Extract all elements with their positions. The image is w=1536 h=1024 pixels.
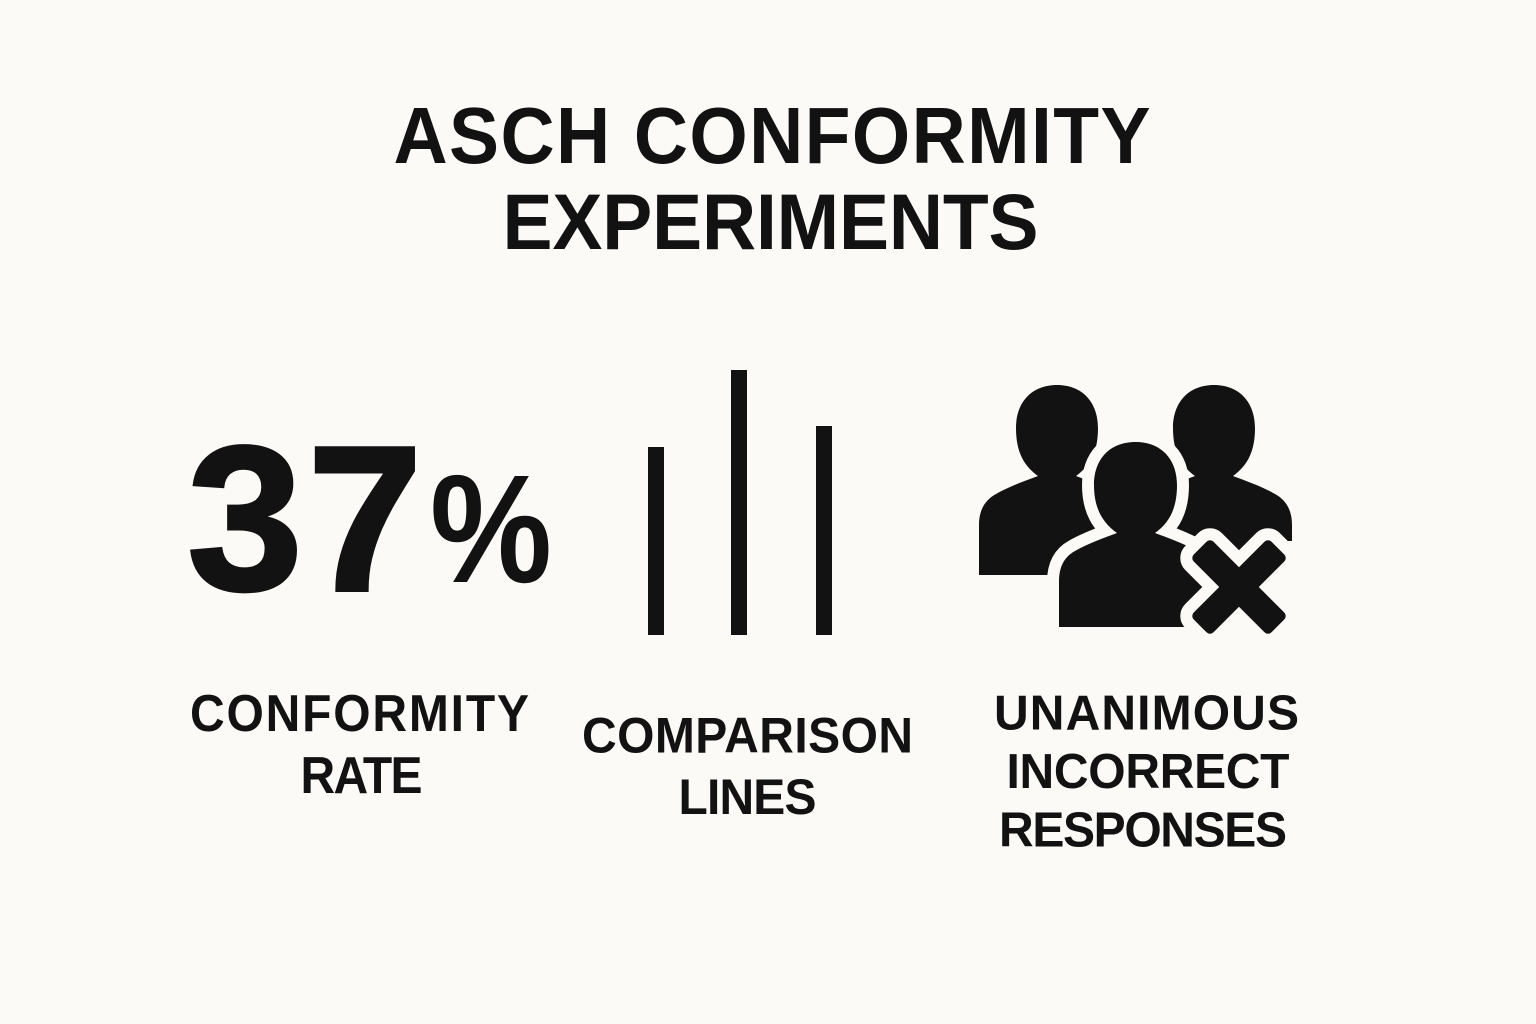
icon: left person	[979, 385, 1135, 575]
icon: front person	[1059, 442, 1214, 627]
label: conformity rate: RATE	[300, 746, 422, 804]
statistic: 37%: 7	[308, 404, 422, 634]
label: unanimous incorrect responses: RESPONSES	[999, 803, 1287, 858]
icon: right person	[1136, 385, 1292, 575]
label: comparison lines: COMPARISON	[582, 709, 913, 764]
statistic: 37%: 3	[187, 404, 303, 634]
label: comparison lines	[582, 709, 913, 825]
statistic: 37%: %	[430, 443, 552, 615]
label: comparison lines: LINES	[678, 770, 816, 825]
label: unanimous incorrect responses	[994, 686, 1299, 858]
title	[394, 92, 1150, 266]
statistic: 37%	[187, 404, 552, 634]
chart: comparison lines	[648, 370, 832, 635]
title: ASCH CONFORMITY	[394, 92, 1150, 181]
label: conformity rate: CONFORMITY	[190, 684, 529, 742]
icon: group with incorrect mark	[979, 385, 1292, 636]
label: conformity rate	[190, 684, 529, 804]
label: unanimous incorrect responses: INCORRECT	[1006, 745, 1290, 799]
icon: x mark	[1190, 538, 1288, 636]
label: unanimous incorrect responses: UNANIMOUS	[994, 686, 1299, 741]
title: EXPERIMENTS	[502, 178, 1038, 266]
icon: front person outline	[1059, 442, 1214, 627]
